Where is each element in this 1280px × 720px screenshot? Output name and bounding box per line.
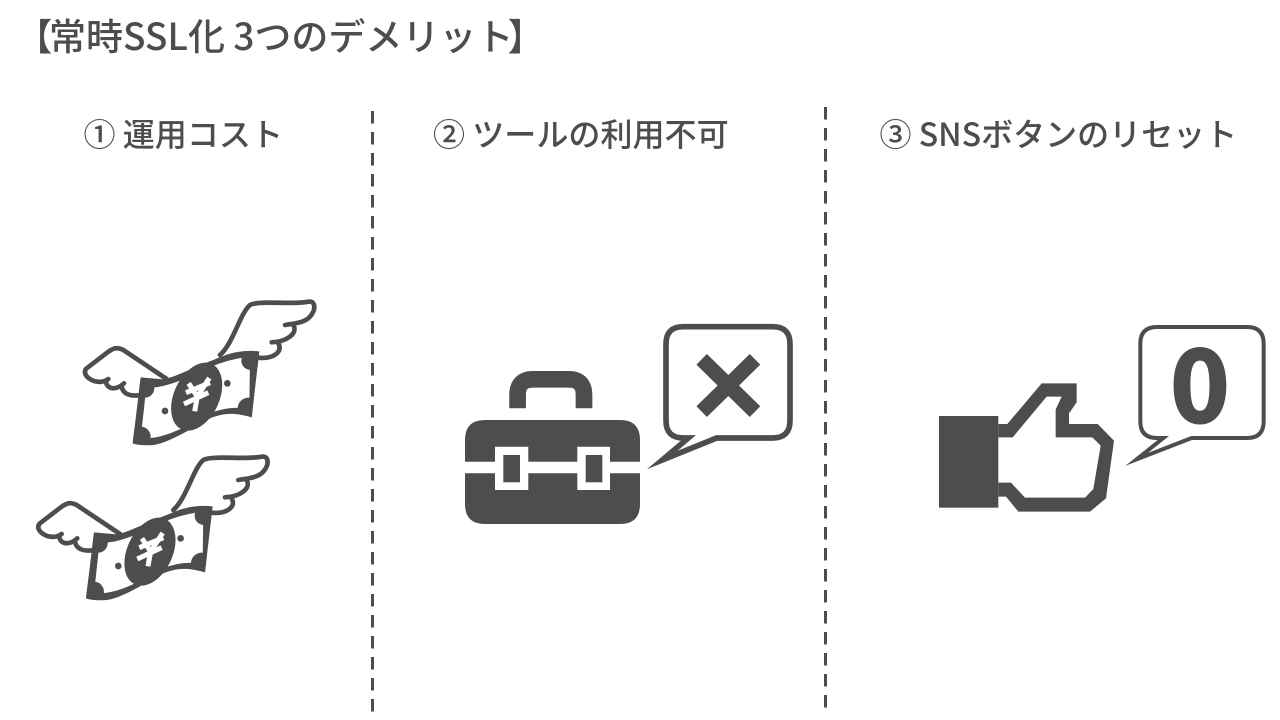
title: 】 <box>508 7 544 61</box>
heading: SNSボタンのリセット: ③ SNSボタンのリセット <box>880 110 1237 156</box>
heading: ツールの利用不可: ② ツールの利用不可 <box>433 110 729 156</box>
callout: cross speech bubble <box>662 327 790 460</box>
icon: flying money top <box>85 302 314 447</box>
callout: zero speech bubble <box>1137 307 1264 459</box>
callout: zero speech bubble: 0 <box>1170 307 1230 452</box>
heading: 運用コスト: ① 運用コスト <box>84 110 283 156</box>
icon: toolbox <box>465 379 640 524</box>
icon: flying money bottom <box>38 457 268 602</box>
title: 常時SSL化 3つのデメリット <box>49 7 513 61</box>
title: 【 <box>16 7 52 61</box>
icon: thumbs up <box>939 383 1114 512</box>
